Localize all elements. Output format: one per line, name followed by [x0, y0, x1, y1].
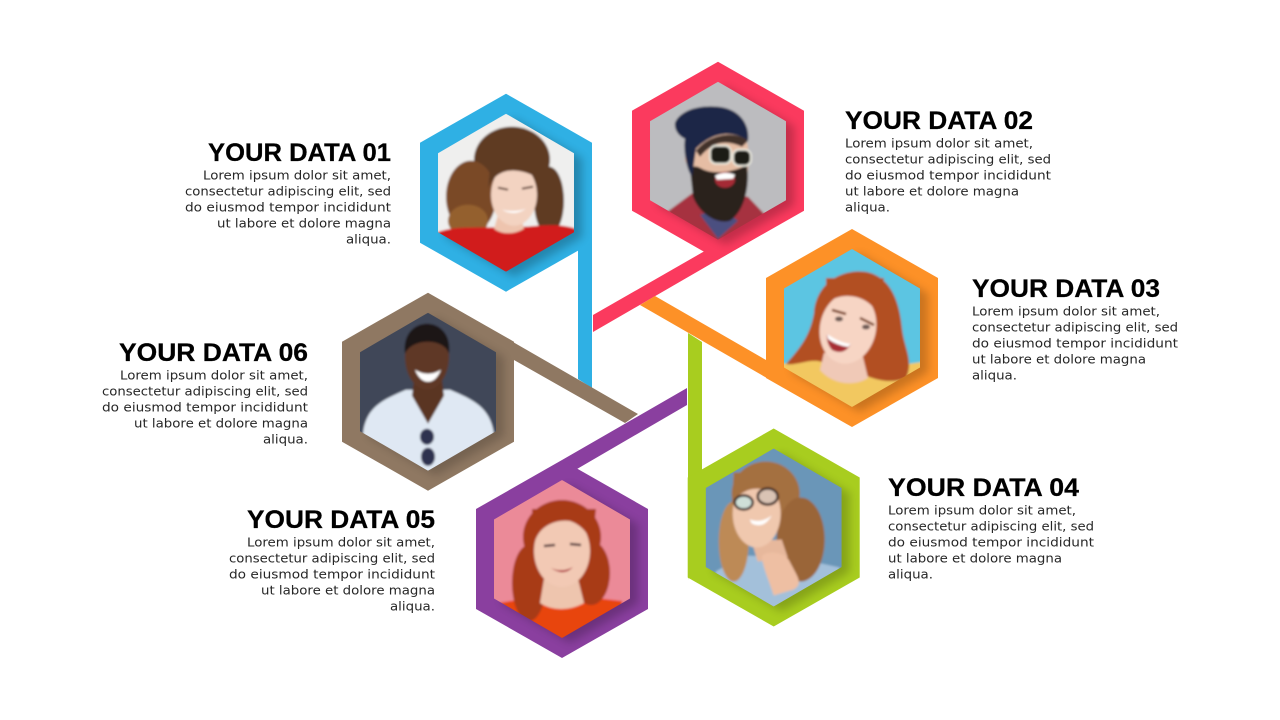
- text block: data 05: ut labore et dolore magna: [261, 584, 435, 598]
- text block: data 03: aliqua.: [972, 368, 1017, 382]
- text block: data 05: YOUR DATA 05: [247, 506, 435, 534]
- text block: data 01: do eiusmod tempor incididunt: [185, 200, 391, 214]
- text block: data 02: consectetur adipiscing elit, sed: [845, 152, 1051, 166]
- panel: data 04 hexagon: [688, 333, 860, 626]
- text block: data 05: [229, 506, 435, 614]
- text block: data 05: consectetur adipiscing elit, sed: [229, 552, 435, 566]
- text block: data 01: [185, 139, 391, 246]
- connector: blue: [578, 170, 592, 388]
- text block: data 02: ut labore et dolore magna: [845, 184, 1019, 198]
- text block: data 04: aliqua.: [888, 568, 933, 582]
- panel: data 06 hexagon: [342, 293, 638, 491]
- text block: data 04: do eiusmod tempor incididunt: [888, 536, 1094, 550]
- text block: data 03: YOUR DATA 03: [972, 275, 1160, 303]
- connector: orange: [640, 296, 852, 427]
- connector: purple: [562, 388, 687, 500]
- text block: data 06: ut labore et dolore magna: [134, 416, 308, 430]
- text block: data 01: consectetur adipiscing elit, sed: [185, 184, 391, 198]
- text block: data 05: aliqua.: [390, 600, 435, 614]
- text block: data 06: Lorem ipsum dolor sit amet,: [120, 368, 308, 382]
- text block: data 02: do eiusmod tempor incididunt: [845, 168, 1051, 182]
- text block: data 04: [888, 474, 1094, 582]
- text block: data 01: YOUR DATA 01: [208, 139, 391, 167]
- text block: data 04: ut labore et dolore magna: [888, 552, 1062, 566]
- text block: data 01: aliqua.: [346, 232, 391, 246]
- panel: data 02 hexagon: [593, 62, 804, 332]
- text block: data 05: Lorem ipsum dolor sit amet,: [247, 536, 435, 550]
- connector: pink: [593, 210, 804, 332]
- text block: data 03: do eiusmod tempor incididunt: [972, 336, 1178, 350]
- blue hexagon portrait: [420, 94, 592, 292]
- text block: data 06: YOUR DATA 06: [119, 339, 308, 367]
- connector: brown: [428, 293, 638, 423]
- text block: data 03: consectetur adipiscing elit, sed: [972, 320, 1178, 334]
- text block: data 02: aliqua.: [845, 200, 890, 214]
- text block: data 06: aliqua.: [263, 432, 308, 446]
- text block: data 01: Lorem ipsum dolor sit amet,: [203, 168, 391, 182]
- text block: data 01: ut labore et dolore magna: [217, 216, 391, 230]
- text block: data 02: [845, 107, 1051, 214]
- text block: data 04: consectetur adipiscing elit, sed: [888, 520, 1094, 534]
- panel: data 01 hexagon: [420, 94, 592, 388]
- text block: data 06: [102, 339, 308, 446]
- text block: data 02: Lorem ipsum dolor sit amet,: [845, 136, 1033, 150]
- text block: data 04: Lorem ipsum dolor sit amet,: [888, 504, 1076, 518]
- text block: data 03: ut labore et dolore magna: [972, 352, 1146, 366]
- connector: green: [688, 333, 702, 580]
- orange hexagon portrait: [766, 229, 938, 427]
- pink hexagon portrait: [632, 62, 804, 260]
- text block: data 02: YOUR DATA 02: [845, 107, 1033, 135]
- text block: data 05: do eiusmod tempor incididunt: [229, 568, 435, 582]
- text block: data 04: YOUR DATA 04: [888, 474, 1079, 502]
- text block: data 06: consectetur adipiscing elit, sed: [102, 384, 308, 398]
- infographic canvas: [102, 62, 1178, 658]
- panel: data 03 hexagon: [640, 229, 938, 427]
- text block: data 03: Lorem ipsum dolor sit amet,: [972, 304, 1160, 318]
- purple hexagon portrait: [476, 460, 648, 658]
- green hexagon portrait: [688, 428, 860, 626]
- brown hexagon portrait: [342, 293, 514, 491]
- text block: data 06: do eiusmod tempor incididunt: [102, 400, 308, 414]
- panel: data 05 hexagon: [476, 388, 687, 658]
- text block: data 03: [972, 275, 1178, 382]
